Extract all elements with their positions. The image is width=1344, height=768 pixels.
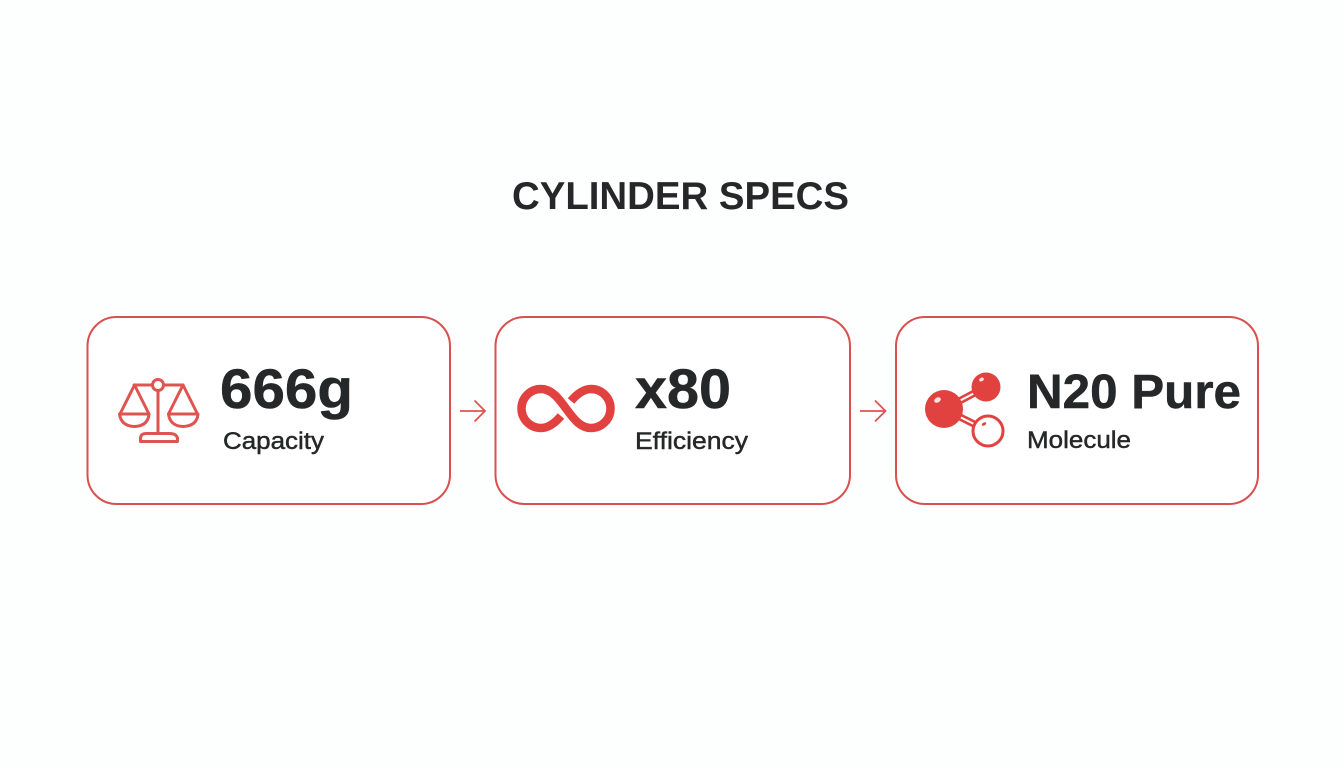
- arrow: efficiency to molecule: [860, 400, 886, 422]
- label: capacity: Capacity: [223, 428, 324, 455]
- panel: molecule: [896, 317, 1258, 504]
- value: x80: x80: [635, 357, 731, 420]
- title: CYLINDER SPECS: [512, 175, 849, 218]
- panel: efficiency: [496, 317, 850, 504]
- label: molecule: Molecule: [1027, 427, 1131, 454]
- value: N20 Pure: N20 Pure: [1027, 366, 1241, 419]
- icon: molecule: [925, 372, 1003, 446]
- value: 666g: 666g: [220, 357, 353, 420]
- icon: balance scale: [120, 380, 198, 442]
- icon: infinity: [522, 389, 610, 428]
- panel: capacity: [88, 317, 450, 504]
- arrow: capacity to efficiency: [460, 400, 485, 422]
- label: efficiency: Efficiency: [635, 428, 748, 455]
